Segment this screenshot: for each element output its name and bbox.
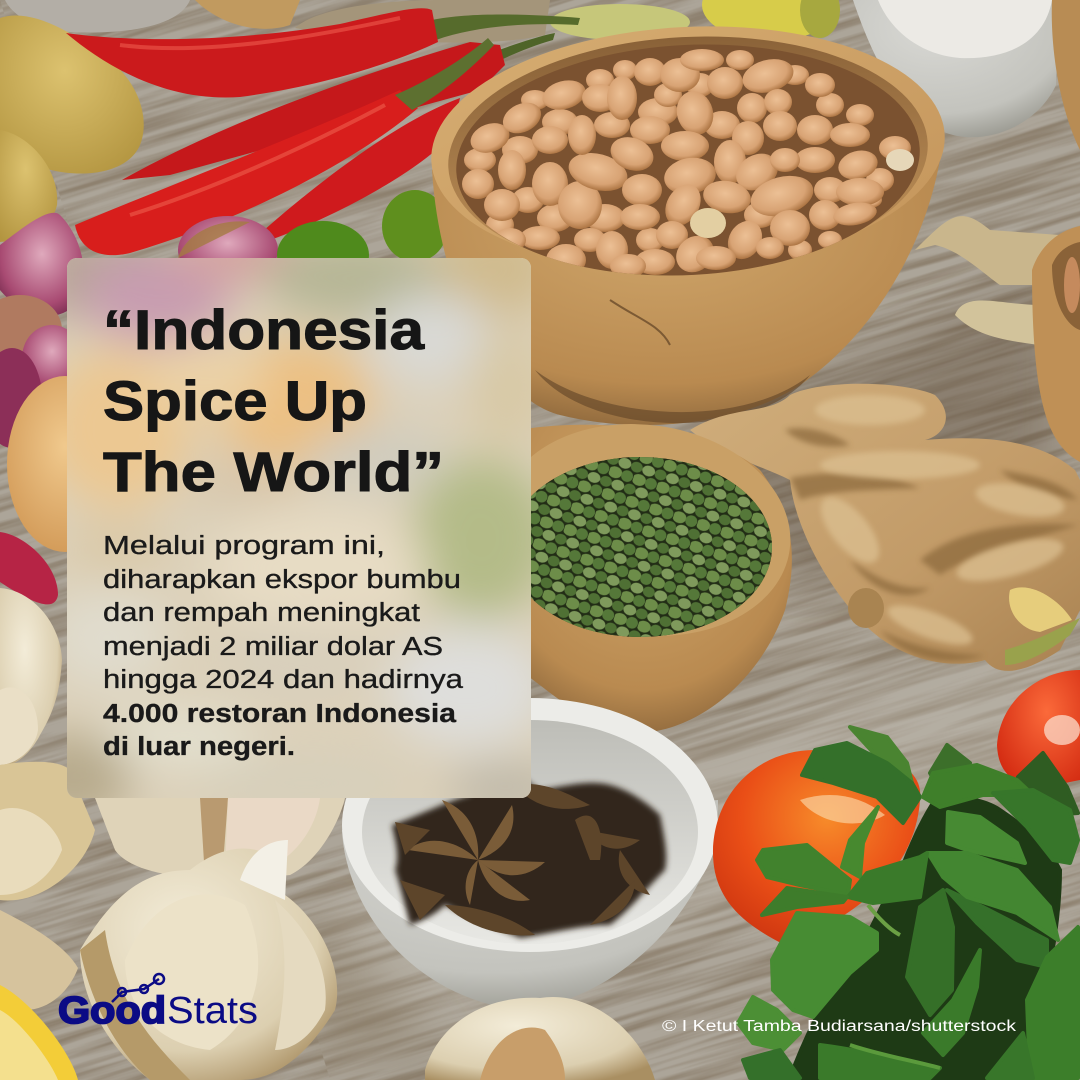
- shallots on the left: [0, 213, 84, 604]
- frosted text panel: [67, 258, 531, 798]
- body paragraph: dan rempah meningkat: [103, 599, 420, 627]
- peanut bowl: [425, 14, 951, 425]
- GoodStats logo: Good: [58, 990, 166, 1032]
- star anise: [392, 750, 666, 938]
- body paragraph: [103, 532, 464, 761]
- photo credit: © I Ketut Tamba Budiarsana/shutterstock: [662, 1018, 1016, 1035]
- wooden bowl top right corner: [1052, 0, 1080, 150]
- body paragraph: 4.000 restoran Indonesia: [103, 700, 457, 728]
- red chillies: [66, 8, 580, 255]
- bowl top left: [5, 0, 190, 33]
- title: [103, 298, 444, 503]
- basil leaves: [738, 727, 1078, 1078]
- tomatoes: [713, 670, 1080, 945]
- title: The World”: [103, 440, 444, 503]
- GoodStats logo: Stats: [167, 990, 258, 1032]
- body paragraph: hingga 2024 dan hadirnya: [103, 666, 464, 694]
- GoodStats logo: [58, 974, 258, 1032]
- small white bowl top right: [853, 0, 1060, 137]
- blurred backdrop colours: [67, 258, 531, 798]
- ginger and items along top edge: [195, 0, 840, 43]
- ginger root: [690, 384, 1080, 671]
- title: Spice Up: [103, 369, 367, 432]
- garlic bulbs and cloves: [0, 588, 655, 1080]
- wooden bowl at the right edge with lemongrass: [915, 216, 1080, 462]
- body paragraph: diharapkan ekspor bumbu: [103, 566, 461, 594]
- white bowl with star anise: [342, 698, 718, 1008]
- limes and shallot behind the panel top: [178, 190, 448, 289]
- potatoes: [0, 16, 144, 242]
- mung bean bowl: [531, 424, 792, 731]
- body paragraph: menjadi 2 miliar dolar AS: [103, 633, 443, 661]
- body paragraph: di luar negeri.: [103, 733, 295, 761]
- peanuts: [450, 40, 930, 280]
- egg: [7, 376, 123, 552]
- title: “Indonesia: [103, 298, 425, 361]
- body paragraph: Melalui program ini,: [103, 532, 385, 560]
